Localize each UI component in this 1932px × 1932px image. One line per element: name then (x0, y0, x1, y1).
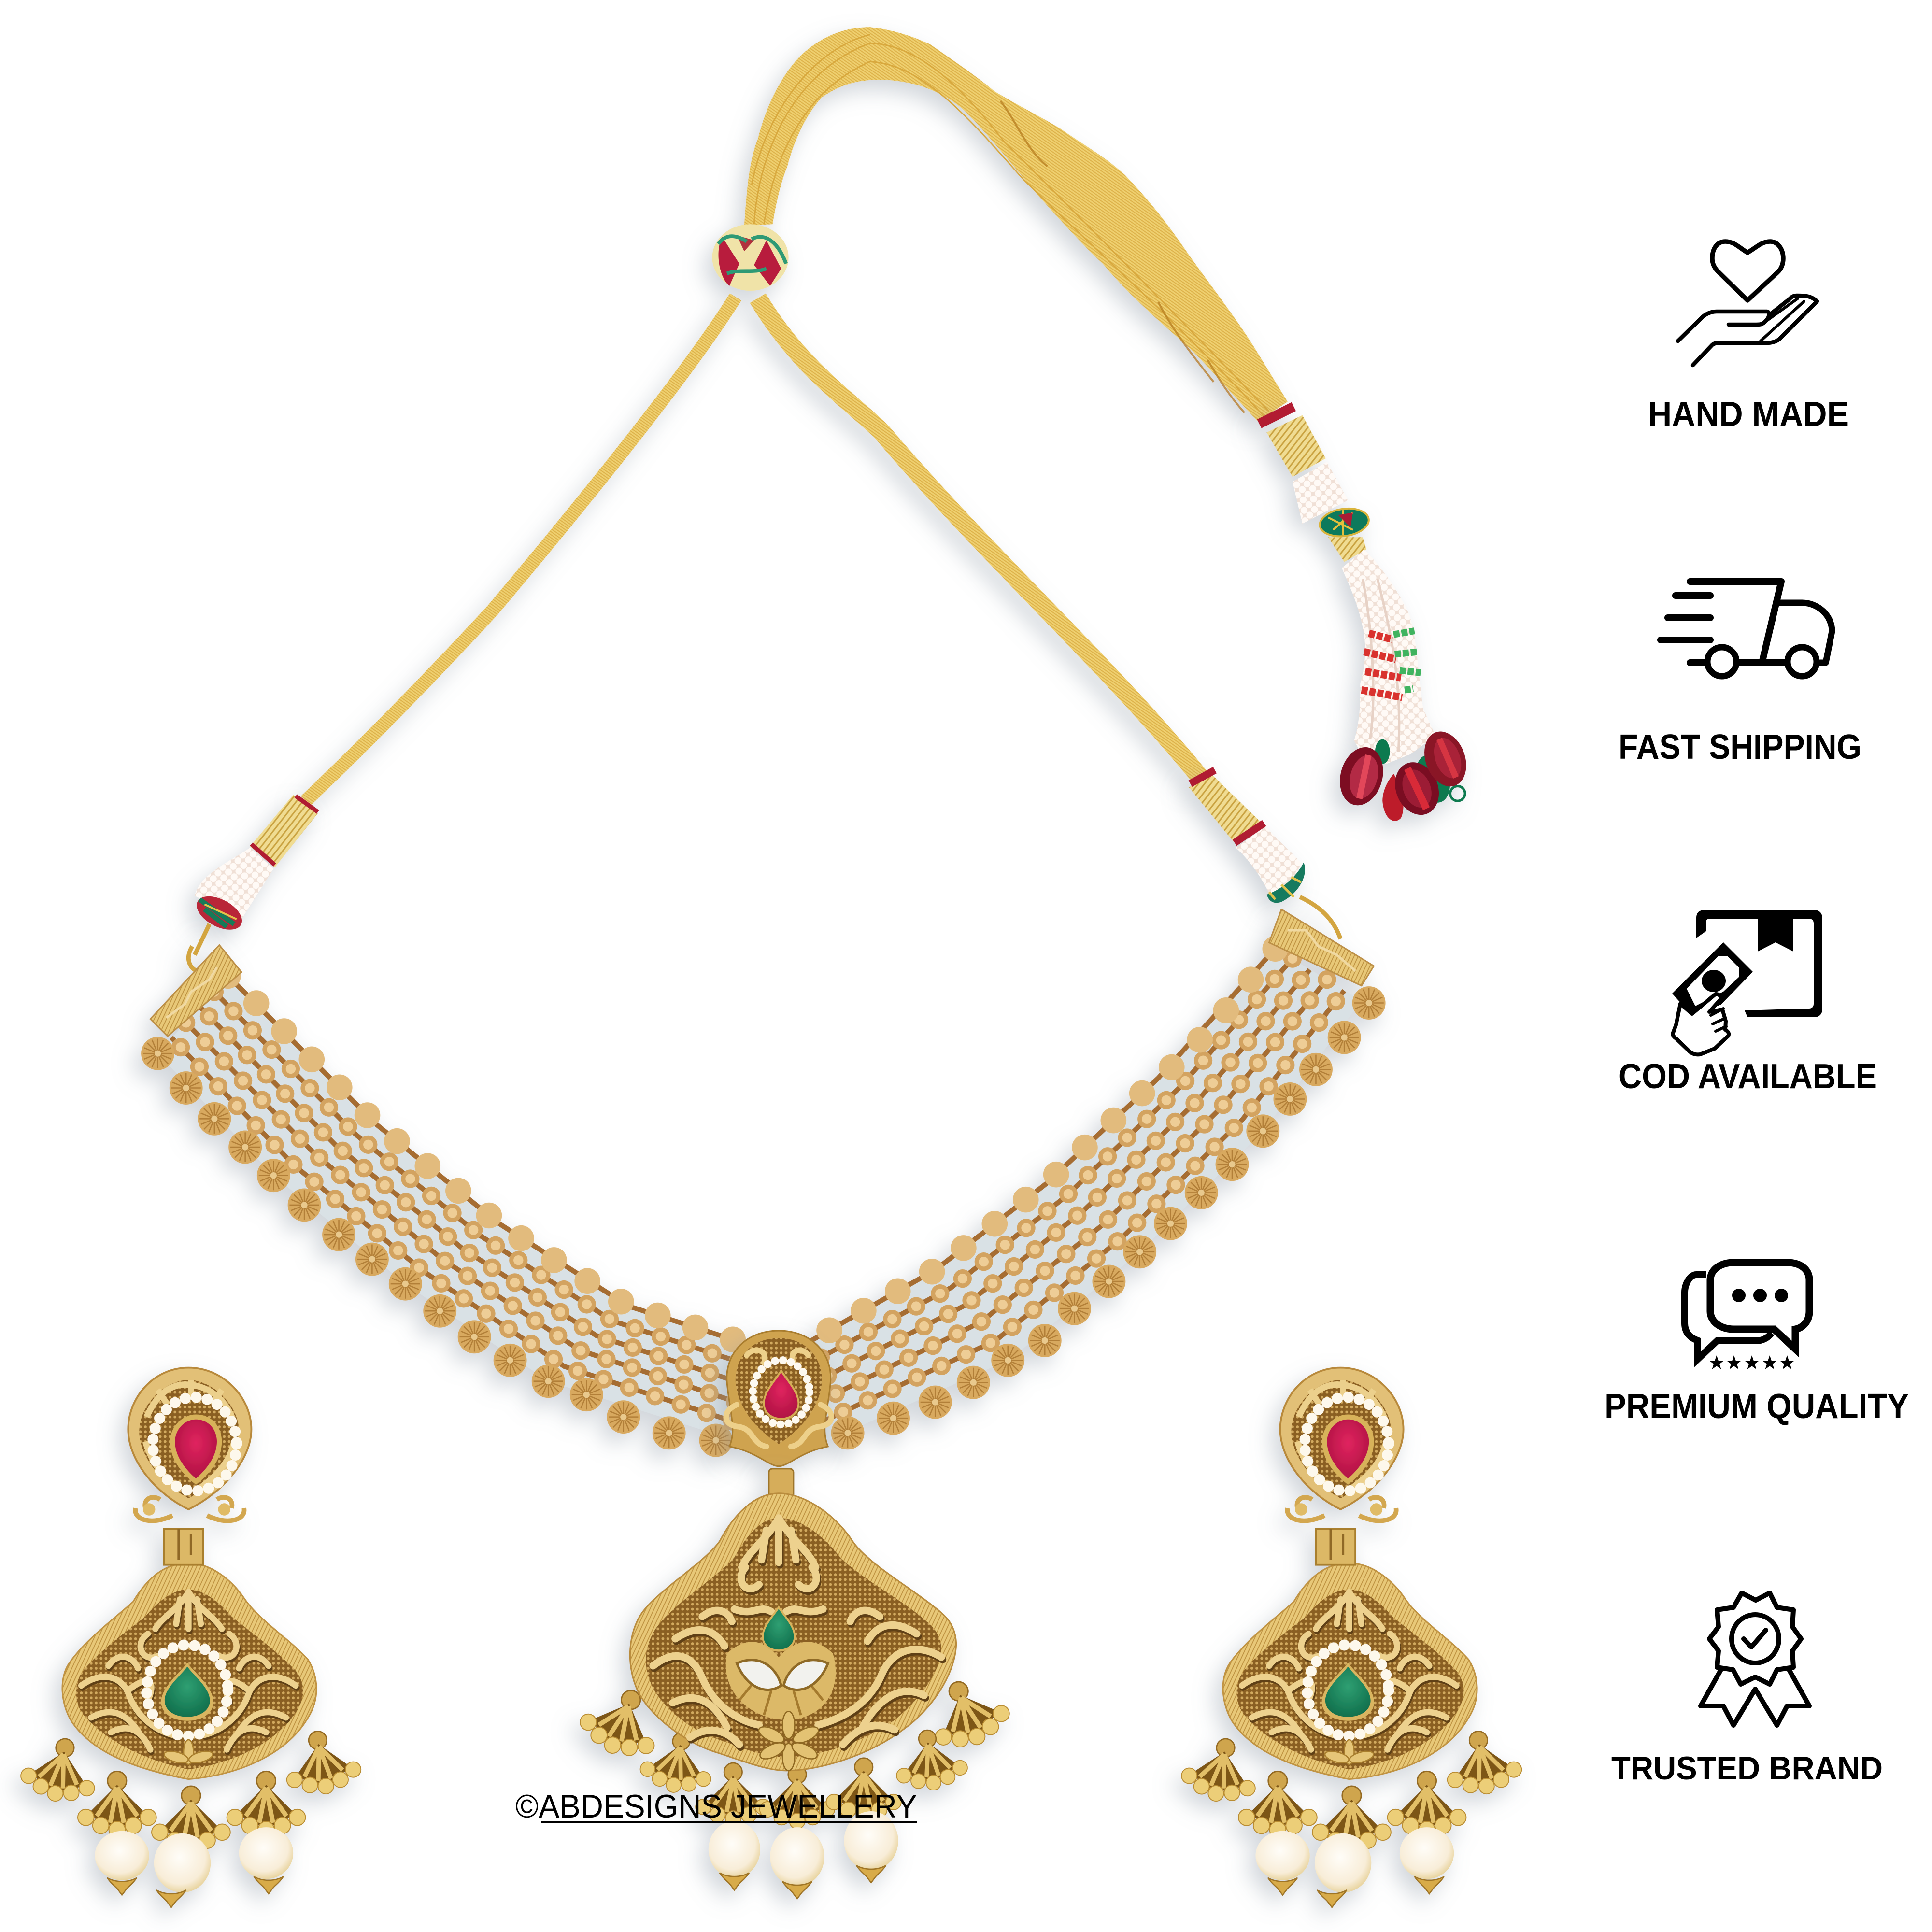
cord tail and tassel (1259, 407, 1474, 822)
icon: fast shipping truck (1661, 582, 1832, 676)
thread knot (1266, 863, 1305, 903)
left cord end with beads (191, 795, 318, 937)
tassel pearls (1342, 550, 1435, 764)
choker mesh band left (141, 924, 752, 1457)
red stripes (1362, 633, 1402, 697)
label: premium quality: PREMIUM QUALITY (1605, 1387, 1909, 1426)
label: hand made: HAND MADE (1648, 395, 1849, 434)
dangling coins (141, 1037, 733, 1457)
left earring (17, 1368, 364, 1907)
pearl section (195, 848, 273, 919)
back bubble (1685, 1275, 1772, 1360)
chain strands (171, 976, 752, 1424)
engraved scrolls (653, 1518, 943, 1747)
emerald stone (763, 1607, 795, 1650)
green stripes (1393, 631, 1421, 690)
chain strands (807, 949, 1344, 1422)
red thread bands (1190, 770, 1264, 843)
parcel box (1696, 910, 1822, 1017)
left clasp (150, 924, 242, 1036)
tail gold wrap (1266, 415, 1326, 477)
left cord (306, 297, 736, 801)
label: trusted brand: TRUSTED BRAND (1611, 1750, 1883, 1787)
red thread bands (251, 796, 318, 865)
bead rows (811, 959, 1344, 1422)
right cord end with beads (1189, 770, 1305, 903)
right earring stud (1280, 1368, 1404, 1565)
pendant body (630, 1493, 956, 1771)
band openings (807, 949, 1362, 1442)
top cord loop (744, 27, 1288, 421)
green backing beads (1375, 739, 1465, 807)
gold wrap (250, 795, 318, 867)
copyright watermark: ©ABDESIGNS JEWELLERY (515, 1788, 917, 1825)
dots (1732, 1289, 1788, 1302)
icon: hand holding heart (1678, 242, 1817, 365)
top bead edge (228, 976, 752, 1346)
kundan stones (737, 1660, 828, 1690)
pearl section (1236, 827, 1301, 896)
tail pearl section (1293, 462, 1348, 524)
stars (1709, 1355, 1794, 1369)
hand (1673, 994, 1729, 1054)
bead rows (171, 992, 749, 1424)
icon: premium quality chat bubbles (1685, 1263, 1809, 1369)
banknote (1672, 942, 1753, 1015)
band openings (158, 976, 752, 1442)
bell clusters (573, 1668, 1016, 1829)
dangling coins (831, 986, 1386, 1449)
small tail knot (1318, 506, 1371, 540)
main pendant (573, 1469, 1016, 1899)
gold wrap (1189, 775, 1263, 841)
gold collar (1328, 537, 1366, 562)
top bead edge (807, 949, 1275, 1343)
right clasp (1269, 897, 1374, 986)
pearls (709, 1811, 898, 1899)
central fan (726, 1642, 836, 1720)
icon: trusted brand badge (1701, 1593, 1809, 1725)
choker centre medallion (726, 1331, 831, 1466)
flower motif (756, 1711, 821, 1771)
slider knot (712, 224, 789, 291)
left earring pendant (17, 1563, 364, 1907)
icon: cash on delivery (1672, 910, 1822, 1054)
red band (1259, 407, 1294, 424)
label: cod available: COD AVAILABLE (1619, 1057, 1877, 1096)
necklace set illustration (17, 27, 1525, 1907)
label: fast shipping: FAST SHIPPING (1619, 728, 1861, 767)
thread knot (191, 890, 247, 937)
right earring (1178, 1368, 1525, 1907)
gold cord and slider knot (306, 27, 1288, 801)
red glass beads (1334, 725, 1474, 822)
choker mesh band right (807, 897, 1386, 1449)
left earring stud (128, 1368, 251, 1565)
right earring pendant (1178, 1563, 1525, 1907)
right cord (758, 298, 1201, 779)
front bubble (1710, 1263, 1809, 1349)
pendant hinge (769, 1469, 794, 1501)
